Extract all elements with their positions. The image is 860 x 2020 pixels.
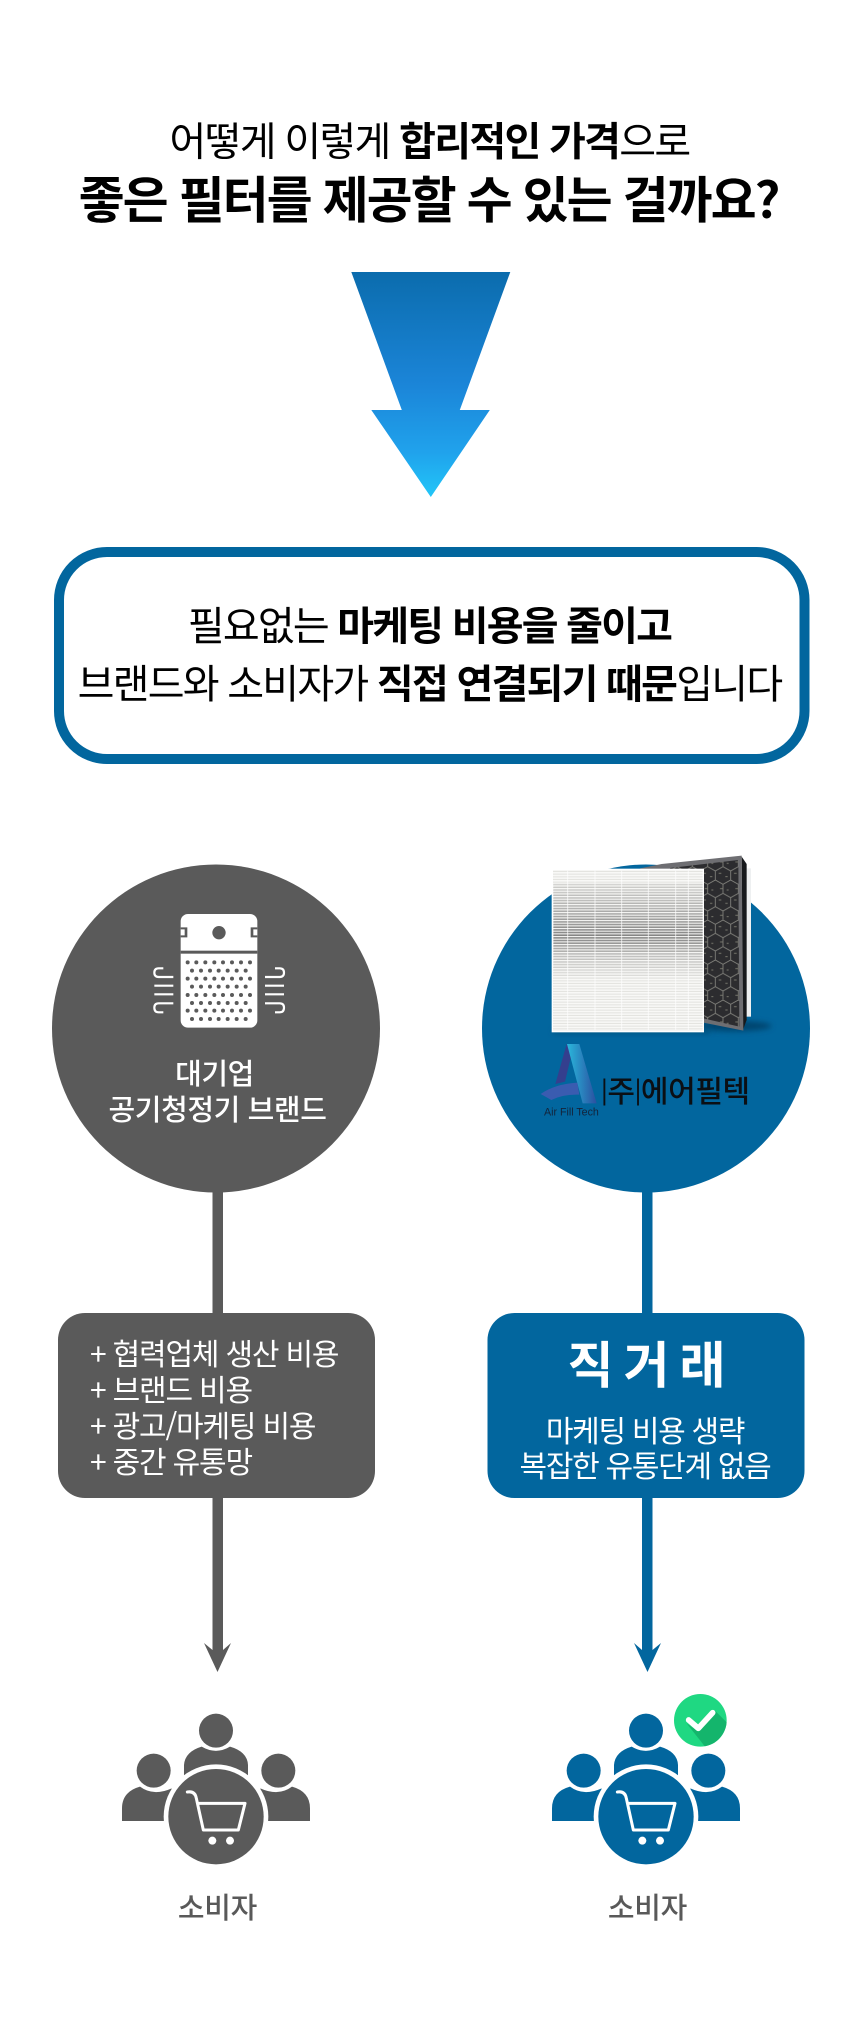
image: filter product	[541, 856, 772, 1119]
text: direct trade benefits: 복잡한 유통단계 없음	[520, 1442, 770, 1486]
label: consumer right: 소비자	[608, 1885, 687, 1927]
label: company name: |	[601, 1071, 607, 1106]
logo: Air Fill Tech mark: Air Fill Tech	[544, 1107, 599, 1119]
infographic canvas	[52, 122, 810, 1921]
icon: green check badge	[674, 1694, 727, 1747]
panel: cost list box: + 광고/마케팅 비용	[90, 1402, 315, 1446]
title	[79, 110, 779, 233]
heading: direct trade: 직 거 래	[568, 1326, 724, 1398]
panel: cost list box	[58, 1313, 375, 1498]
label: consumer left: 소비자	[178, 1885, 257, 1927]
callout box: 필요없는 마케팅 비용을 줄이고	[188, 594, 672, 652]
big gradient down arrow	[351, 272, 510, 497]
panel: cost list box: + 브랜드 비용	[90, 1366, 252, 1410]
left connector arrow	[204, 1185, 231, 1672]
panel: Air Fill Tech circle	[482, 856, 810, 1192]
title: 어떻게 이렇게 합리적인 가격으로	[170, 110, 689, 168]
panel: large corporate brand circle	[52, 864, 380, 1192]
right connector arrow	[634, 1185, 661, 1672]
panel: direct trade box	[488, 1313, 804, 1498]
callout box: 브랜드와 소비자가 직접 연결되기 때문입니다	[78, 652, 782, 710]
title: 좋은 필터를 제공할 수 있는 걸까요?	[79, 161, 779, 233]
label: company name: 에어필텍	[641, 1067, 750, 1111]
panel: cost list box: + 중간 유통망	[90, 1438, 252, 1482]
icon: consumers with cart (blue)	[552, 1694, 740, 1869]
label: company name: |	[635, 1071, 641, 1106]
icon: consumers with cart (grey)	[122, 1711, 310, 1869]
text: direct trade benefits: 마케팅 비용 생략	[546, 1407, 745, 1451]
icon: air purifier	[154, 914, 284, 1028]
label: company name: 주	[607, 1067, 635, 1111]
label: large corporate air purifier brand: 대기업	[175, 1051, 254, 1093]
callout box	[59, 552, 804, 759]
logo: Air Fill Tech mark	[541, 1044, 599, 1119]
label: large corporate air purifier brand: 공기청정기 브랜드	[109, 1087, 326, 1129]
panel: cost list box: + 협력업체 생산 비용	[90, 1330, 338, 1374]
